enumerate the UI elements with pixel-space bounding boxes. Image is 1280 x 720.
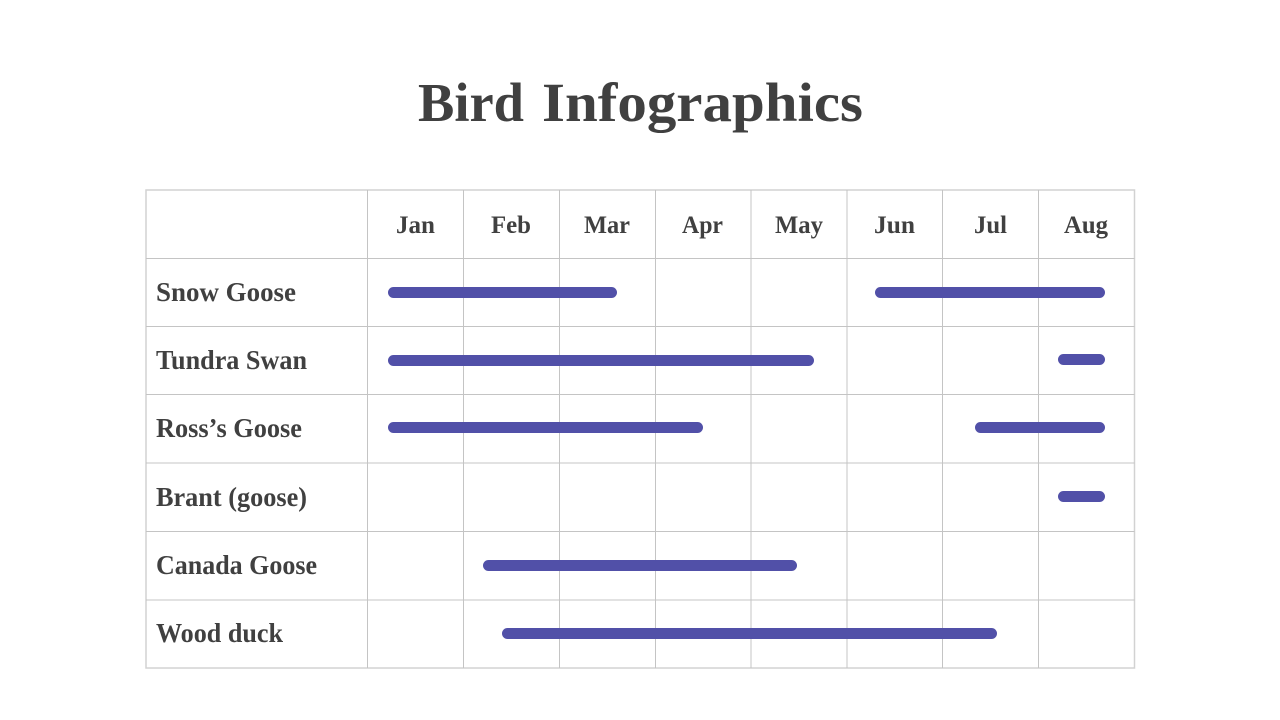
bird name labels: Ross’s Goose [156, 413, 302, 443]
bird name labels: Brant (goose) [156, 482, 307, 512]
month headers: May [775, 212, 823, 239]
month headers: Jun [874, 212, 915, 239]
bird name labels: Snow Goose [156, 277, 296, 307]
title: Bird [418, 72, 524, 133]
month headers: Mar [584, 212, 630, 239]
timeline bars [388, 287, 1105, 639]
title: Infographics [542, 72, 863, 133]
grid table [146, 190, 1134, 668]
month headers: Apr [682, 212, 723, 239]
bird name labels [156, 277, 317, 648]
bird name labels: Wood duck [156, 618, 283, 648]
month headers [396, 212, 1108, 239]
bird name labels: Tundra Swan [156, 345, 307, 375]
bird name labels: Canada Goose [156, 550, 317, 580]
month headers: Jul [974, 212, 1007, 239]
month headers: Jan [396, 212, 435, 239]
month headers: Feb [491, 212, 531, 239]
month headers: Aug [1064, 212, 1108, 239]
